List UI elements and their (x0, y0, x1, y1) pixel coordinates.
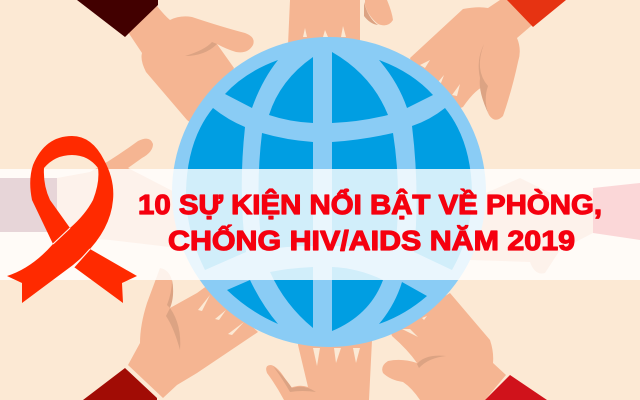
icon: top-centre hand (288, 0, 393, 45)
icon: bottom-left hand with dark red sleeve (83, 268, 258, 400)
ribbon descending tail (32, 200, 70, 244)
title: CHỐNG HIV/AIDS NĂM 2019 (168, 224, 575, 256)
finger gaps (198, 26, 460, 366)
title (138, 189, 602, 256)
ribbon crossing gaps (53, 228, 90, 267)
icon: top-right hand with red sleeve (410, 0, 566, 120)
banner (0, 169, 640, 280)
icon: right hand behind banner (470, 178, 640, 274)
icon: globe (172, 37, 486, 347)
icon: red ribbon (7, 136, 137, 303)
icon: bottom-centre hand (266, 340, 372, 400)
icon: top-left hand with dark sleeve (77, 0, 254, 130)
ribbon loop and crossing band (7, 136, 113, 303)
icon: bottom-right hand with red sleeve (382, 293, 547, 400)
ocean cells (186, 52, 472, 331)
globe disc (172, 37, 486, 347)
title: 10 SỰ KIỆN NỔI BẬT VỀ PHÒNG, (138, 189, 602, 220)
icon: left hand behind banner (0, 139, 195, 250)
